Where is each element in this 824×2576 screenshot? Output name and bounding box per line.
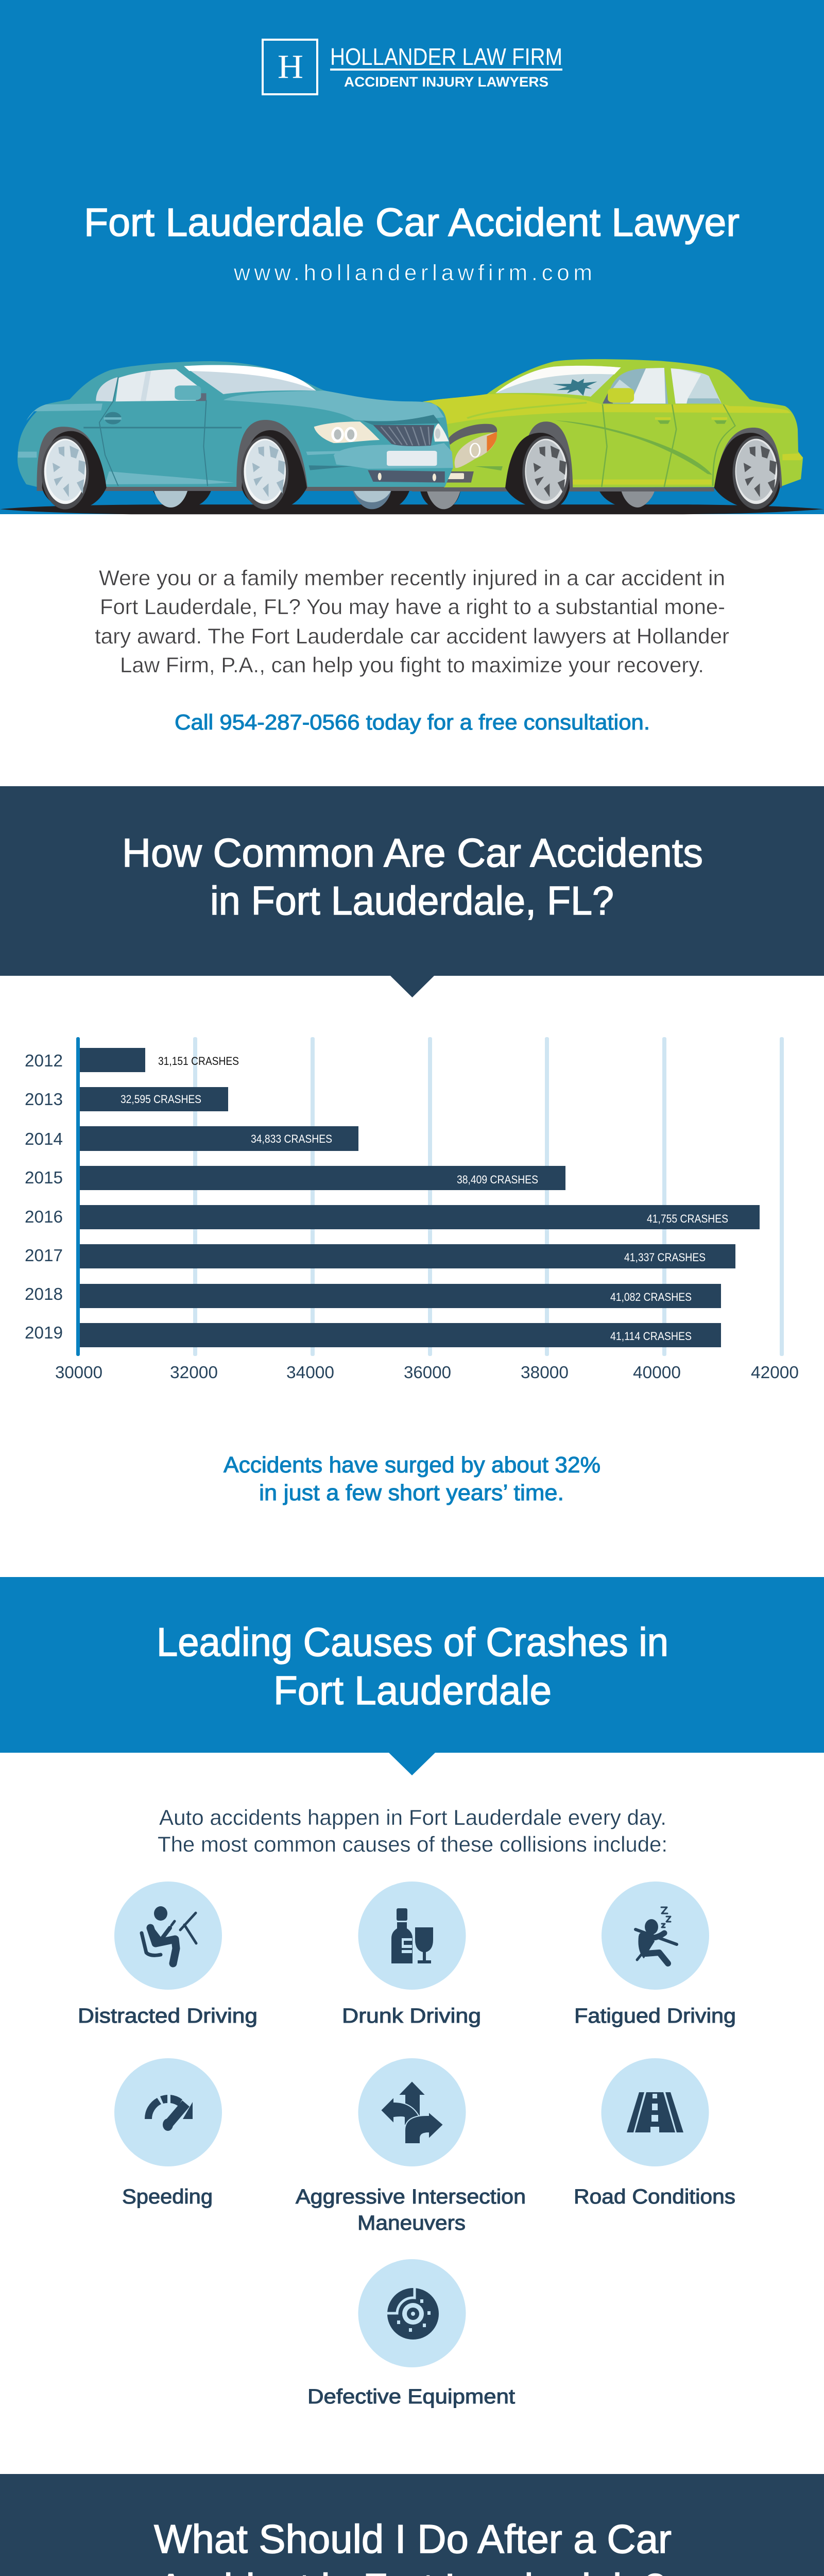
heading: What Should I Do After a Car bbox=[154, 2516, 672, 2562]
heading: Leading Causes of Crashes in bbox=[157, 1619, 668, 1665]
bar chart: crashes per year: 36000 bbox=[404, 1363, 451, 1382]
callout: 32% surge: in just a few short years’ time. bbox=[259, 1480, 564, 1505]
bar chart: crashes per year: 2017 bbox=[25, 1246, 63, 1265]
causes intro text bbox=[158, 1805, 667, 1856]
bar chart: crashes per year: 38,409 CRASHES bbox=[457, 1173, 538, 1186]
label: Speeding bbox=[122, 2185, 213, 2208]
bar chart: crashes per year: 2013 bbox=[25, 1090, 63, 1109]
panel: leading causes header bbox=[0, 1577, 824, 1775]
logo letter: H bbox=[278, 48, 303, 86]
icon: speedometer bbox=[145, 2095, 193, 2131]
heading bbox=[157, 1619, 668, 1713]
label bbox=[296, 2185, 526, 2234]
bar chart: crashes per year: 31,151 CRASHES bbox=[158, 1055, 239, 1067]
icon: green car bbox=[412, 359, 803, 510]
callout: 32% surge: Accidents have surged by about 32% bbox=[224, 1452, 600, 1478]
label: Distracted Driving bbox=[78, 2005, 258, 2027]
bar chart: crashes per year: 42000 bbox=[751, 1363, 799, 1382]
heading: in Fort Lauderdale, FL? bbox=[210, 878, 614, 923]
bar chart: crashes per year: 41,114 CRASHES bbox=[610, 1330, 692, 1343]
bar chart: crashes per year: 2014 bbox=[25, 1129, 63, 1148]
label: Drunk Driving bbox=[342, 2005, 481, 2027]
bar chart: crashes per year: 32,595 CRASHES bbox=[121, 1093, 201, 1106]
bar chart: crashes per year: 2018 bbox=[25, 1284, 63, 1303]
bar chart: crashes per year: 38000 bbox=[521, 1363, 569, 1382]
logo bbox=[263, 40, 562, 94]
bar chart: crashes per year: 34,833 CRASHES bbox=[251, 1132, 332, 1145]
panel: what to do header bbox=[0, 2474, 824, 2576]
label: Defective Equipment bbox=[307, 2385, 515, 2408]
label: Road Conditions bbox=[574, 2185, 735, 2208]
bar chart: crashes per year: 32000 bbox=[170, 1363, 218, 1382]
icon: road arrows bbox=[381, 2081, 443, 2144]
bar chart: crashes per year: 2016 bbox=[25, 1207, 63, 1226]
label: Maneuvers bbox=[357, 2212, 466, 2234]
bar chart: crashes per year bbox=[25, 1037, 799, 1382]
cause: drunk driving bbox=[342, 1882, 481, 2027]
bar chart: crashes per year: 2019 bbox=[25, 1323, 63, 1342]
panel: hero background bbox=[0, 0, 824, 514]
icon: bottle and glass bbox=[391, 1908, 433, 1963]
logo tagline: ACCIDENT INJURY LAWYERS bbox=[344, 74, 548, 90]
intro paragraph: tary award. The Fort Lauderdale car accident lawyers at Hollander bbox=[95, 624, 729, 648]
call to action: Call 954-287-0566 today for a free consultation. bbox=[175, 710, 650, 734]
bar chart: crashes per year: 40000 bbox=[633, 1363, 681, 1382]
icon: brake disc bbox=[386, 2286, 439, 2340]
callout: 32% surge bbox=[224, 1452, 600, 1505]
heading: How Common Are Car Accidents bbox=[122, 830, 703, 875]
label: Aggressive Intersection bbox=[296, 2185, 526, 2208]
icon: teal car bbox=[18, 361, 453, 510]
intro paragraph: Law Firm, P.A., can help you fight to maximize your recovery. bbox=[120, 653, 704, 677]
intro paragraph: Were you or a family member recently injured in a car accident in bbox=[99, 566, 725, 590]
cause: distracted driving bbox=[78, 1882, 258, 2027]
panel: crash statistics header bbox=[0, 786, 824, 997]
heading: Fort Lauderdale bbox=[273, 1668, 552, 1713]
label: Fatigued Driving bbox=[574, 2005, 736, 2027]
logo firm name: HOLLANDER LAW FIRM bbox=[330, 43, 562, 70]
cause: fatigued driving bbox=[574, 1882, 736, 2027]
logo mark bbox=[263, 40, 317, 94]
bar chart: crashes per year: 41,755 CRASHES bbox=[647, 1212, 728, 1225]
cause: defective equipment bbox=[307, 2259, 515, 2408]
intro paragraph: Fort Lauderdale, FL? You may have a right to a substantial mone- bbox=[100, 595, 725, 619]
causes intro text: Auto accidents happen in Fort Lauderdale every day. bbox=[159, 1805, 666, 1829]
intro paragraph bbox=[95, 566, 729, 677]
bar chart: crashes per year: 34000 bbox=[286, 1363, 334, 1382]
bar chart: crashes per year: 30000 bbox=[55, 1363, 102, 1382]
cause: aggressive intersection maneuvers bbox=[296, 2058, 526, 2234]
heading bbox=[122, 830, 703, 923]
cause: road conditions bbox=[574, 2058, 735, 2208]
title: Fort Lauderdale Car Accident Lawyer bbox=[84, 200, 740, 245]
icon: road bbox=[627, 2092, 683, 2132]
bar chart: crashes per year: 2015 bbox=[25, 1168, 63, 1187]
cause: speeding bbox=[114, 2058, 222, 2208]
icon: sleeping driver bbox=[636, 1907, 677, 1963]
bar chart: crashes per year: 2012 bbox=[25, 1051, 63, 1070]
bar chart: crashes per year: 41,337 CRASHES bbox=[624, 1251, 706, 1264]
icon: driver with phone bbox=[142, 1906, 196, 1963]
illustration: two cars colliding bbox=[0, 359, 824, 514]
causes intro text: The most common causes of these collisions include: bbox=[158, 1832, 667, 1856]
website url: www.hollanderlawfirm.com bbox=[233, 260, 592, 285]
bar chart: crashes per year: 41,082 CRASHES bbox=[610, 1291, 692, 1303]
